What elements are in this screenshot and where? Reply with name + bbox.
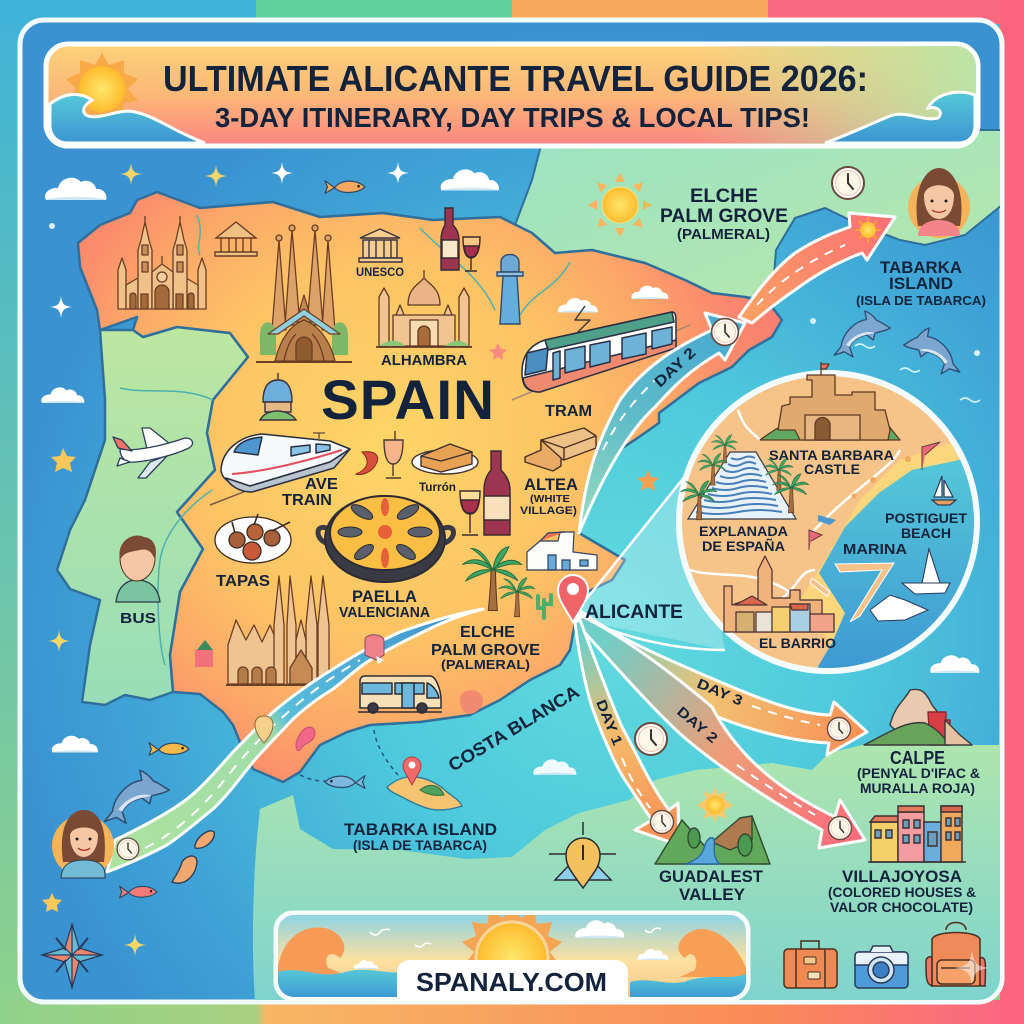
icon: compass rose — [42, 924, 102, 988]
icon: clock on sea — [635, 723, 667, 755]
street lines — [690, 410, 900, 600]
label: TABARKA ISLAND upper — [856, 258, 986, 308]
label: website: SPANALY.COM — [416, 967, 607, 997]
route: DAY 1 dashes — [622, 758, 650, 808]
sparkle — [954, 950, 990, 986]
icon: octopus — [460, 690, 483, 714]
icon: dolphin west — [105, 770, 169, 823]
icon: footer clouds — [354, 920, 668, 969]
icon: El Barrio houses — [724, 556, 834, 632]
label: DAY 3: DAY 3 — [695, 675, 745, 709]
label: AVE TRAIN: AVE — [305, 476, 338, 493]
label: Turron: Turrón — [419, 480, 456, 494]
icon: cactus — [538, 595, 551, 618]
label: ALTEA white village: ALTEA — [524, 475, 578, 494]
label: SANTA BARBARA CASTLE: SANTA BARBARA — [769, 447, 894, 463]
label: VILLAJOYOSA: (COLORED HOUSES & — [828, 885, 976, 900]
label: CALPE: (PENYAL D'IFAC & — [857, 766, 980, 781]
label: ELCHE PALM GROVE upper — [660, 186, 788, 243]
icon: footer left wave — [278, 928, 344, 974]
route: coral dashes — [757, 245, 845, 305]
icon: girl right avatar — [908, 168, 970, 238]
label: POSTIGUET BEACH: BEACH — [901, 525, 951, 541]
land: France top right — [515, 130, 1002, 300]
icon: sangria glass — [384, 431, 403, 478]
label: ELCHE PALM GROVE upper: ELCHE — [690, 186, 758, 207]
label: SANTA BARBARA CASTLE: CASTLE — [804, 461, 860, 477]
route: dashed from bus to island — [300, 730, 398, 781]
label: ALICANTE: ALICANTE — [585, 602, 683, 623]
icon: backpack — [926, 922, 985, 986]
ring — [679, 373, 977, 671]
icon: large sun — [575, 160, 665, 250]
icon: marina pier — [810, 563, 894, 622]
label: TABARKA ISLAND lower — [344, 820, 497, 853]
label: EXPLANADA DE ESPANA — [699, 523, 788, 554]
land: region borders — [120, 215, 570, 665]
label: TABARKA ISLAND lower: (ISLA DE TABARCA) — [353, 837, 487, 853]
label: UNESCO: UNESCO — [356, 265, 404, 279]
icon: seahorse — [296, 727, 315, 751]
label: GUADALEST VALLEY — [659, 867, 764, 904]
route: dashes — [603, 380, 655, 450]
icon: clock on DAY 2 — [712, 319, 738, 345]
sand strip — [801, 443, 960, 644]
label: ALTEA white village: VILLAGE) — [520, 505, 577, 517]
icon: fish south — [120, 886, 157, 898]
icon: banner sun — [66, 53, 138, 125]
icon: small sun over valley — [697, 787, 733, 823]
route: DAY 2 coral arrow — [739, 213, 895, 323]
route: light beam to inset — [580, 470, 725, 650]
icon: Alhambra — [376, 270, 472, 347]
label: CALPE: MURALLA ROJA) — [860, 781, 975, 796]
icon: palm tree large — [462, 547, 522, 610]
label: VILLAJOYOSA: VALOR CHOCOLATE) — [830, 900, 973, 915]
label: ELCHE PALM GROVE lower — [431, 624, 540, 672]
icon: small domed chapel — [260, 373, 296, 420]
clouds and sparkles — [41, 162, 980, 956]
label: ALTEA white village — [520, 475, 578, 517]
label: CALPE: CALPE — [890, 748, 945, 768]
land: Spain — [78, 192, 782, 782]
label: EXPLANADA DE ESPANA: DE ESPAÑA — [702, 537, 785, 554]
route: DAY 3 arrow — [576, 612, 867, 755]
label: TRAM: TRAM — [545, 403, 592, 420]
icon: suitcase — [784, 941, 837, 988]
label: VILLAJOYOSA — [828, 867, 976, 915]
icon: small stamp — [195, 640, 213, 667]
label: ELCHE PALM GROVE lower: PALM GROVE — [431, 642, 540, 659]
icon: airplane — [113, 428, 192, 478]
route: DAY 3 dashes — [752, 706, 820, 725]
icon: birds — [370, 928, 661, 947]
icon: cathedral north-west — [118, 216, 206, 309]
label: ELCHE PALM GROVE lower: ELCHE — [460, 624, 515, 641]
icon: clock DAY 2 lower — [828, 816, 852, 840]
label: AVE TRAIN — [282, 476, 338, 509]
icon: banner left wave — [50, 94, 205, 143]
label: EL BARRIO: EL BARRIO — [759, 635, 836, 651]
icon: tram — [512, 306, 690, 400]
route: road centre dashes — [145, 660, 360, 848]
label: PAELLA VALENCIANA — [339, 587, 430, 621]
icon: dolphin north east — [834, 311, 890, 357]
label: TABARKA ISLAND lower: TABARKA ISLAND — [344, 820, 497, 839]
icon: Villajoyosa houses — [868, 806, 966, 862]
label: COSTA BLANCA: COSTA BLANCA — [445, 682, 583, 775]
label: AVE TRAIN: TRAIN — [282, 492, 332, 509]
label: ELCHE PALM GROVE upper: PALM GROVE — [660, 206, 788, 227]
icon: Explanada promenade — [688, 452, 796, 519]
icon: sun on arrow — [855, 217, 881, 243]
land: North Africa bottom — [253, 745, 1002, 1002]
icon: clock top right — [832, 167, 864, 199]
icon: turron on plate — [412, 444, 478, 474]
fish north — [325, 181, 365, 193]
website pill — [397, 960, 628, 1000]
icon: Sagrada Familia — [256, 225, 352, 362]
icon: island vegetation — [420, 785, 444, 795]
route: DAY 2 lower arrow — [575, 616, 865, 848]
label: ELCHE PALM GROVE lower: (PALMERAL) — [441, 657, 530, 672]
title line 1: ULTIMATE ALICANTE TRAVEL GUIDE 2026: — [163, 58, 868, 99]
icon: Santa Barbara castle — [760, 362, 900, 440]
icon: dolphin east — [904, 328, 960, 374]
label: GUADALEST VALLEY: VALLEY — [679, 885, 746, 904]
label: ALTEA white village: (WHITE — [530, 493, 570, 505]
icon: waypoint flamenco — [365, 635, 384, 664]
icon: camera — [855, 946, 908, 988]
label: BUS + boy avatar: BUS — [120, 610, 156, 627]
label: DAY 1: DAY 1 — [593, 697, 626, 748]
label: CALPE — [857, 748, 980, 796]
footer banner — [275, 906, 749, 1000]
icon: banner right wave — [825, 92, 975, 143]
icon: footer water left — [278, 970, 397, 997]
label: TABARKA ISLAND upper: TABARKA — [880, 258, 962, 277]
icon: large turron — [525, 428, 596, 471]
label: TABARKA ISLAND upper: (ISLA DE TABARCA) — [856, 293, 986, 308]
icon: Canary islands — [172, 831, 214, 883]
icon: chili pepper — [356, 452, 378, 475]
icon: tapas plate — [215, 514, 291, 563]
icon: lighthouse — [497, 254, 523, 324]
icon: compass location pin — [549, 822, 616, 888]
icon: sailboat top — [932, 476, 956, 505]
icon: Calpe rock — [864, 689, 972, 745]
route: beam edges — [580, 470, 725, 650]
icon: paella pan — [318, 496, 454, 582]
label: BUS + boy avatar — [116, 536, 160, 627]
icon: AVE train — [210, 433, 350, 505]
title line 2: 3-DAY ITINERARY, DAY TRIPS & LOCAL TIPS! — [215, 102, 810, 133]
decoration: waves — [855, 344, 980, 402]
icon: footer water right — [630, 974, 746, 997]
label: EXPLANADA DE ESPANA: EXPLANADA — [699, 523, 788, 539]
icon: clock on left road — [117, 838, 139, 860]
icon: clock DAY 1 — [650, 810, 674, 834]
icon: bus — [358, 676, 442, 713]
label: TABARKA ISLAND upper: ISLAND — [889, 274, 953, 293]
label: DAY 2 upper: DAY 2 — [651, 344, 699, 391]
icon: white village — [527, 532, 597, 570]
icon: temple — [215, 222, 257, 256]
icon: blue fish — [325, 776, 365, 788]
label: TAPAS: TAPAS — [216, 573, 270, 590]
icon: promenade palms — [680, 435, 809, 520]
bay — [817, 460, 974, 668]
land: Portugal — [57, 327, 248, 705]
icon: yacht — [870, 595, 928, 621]
icon: cathedral south — [226, 576, 332, 685]
label: VILLAJOYOSA: VILLAJOYOSA — [842, 867, 962, 886]
icon: palm tree small — [498, 578, 535, 617]
label: PAELLA VALENCIANA: VALENCIANA — [339, 604, 430, 621]
label: ELCHE PALM GROVE upper: (PALMERAL) — [677, 226, 770, 243]
icon: island pin — [403, 757, 421, 785]
icon: clock DAY 3 — [827, 717, 851, 741]
icon: wine bottle and glass south — [460, 451, 510, 535]
label: POSTIGUET BEACH — [885, 510, 967, 541]
icon: wine bottle and glass — [441, 208, 480, 271]
route: DAY 1 arrow — [575, 620, 679, 845]
inset: Alicante city map circle — [679, 362, 1000, 690]
icon: Guadalest valley — [655, 816, 770, 864]
icon: Tabarca island — [387, 777, 462, 810]
title banner — [46, 44, 978, 146]
icon: flags and beach items — [809, 442, 940, 550]
label: DAY 2 lower: DAY 2 — [674, 703, 721, 746]
icon: waypoint medallion — [255, 716, 273, 743]
icon: girl left avatar — [52, 810, 114, 878]
label: GUADALEST VALLEY: GUADALEST — [659, 867, 764, 886]
icon: footer sun — [462, 915, 562, 960]
icon: fish west — [149, 743, 189, 755]
label: PAELLA VALENCIANA: PAELLA — [352, 587, 417, 606]
map: all land — [57, 130, 1002, 1002]
label: ALHAMBRA: ALHAMBRA — [381, 352, 467, 369]
icon: UNESCO temple — [359, 229, 402, 262]
route: Malaga road — [107, 609, 483, 872]
label: SANTA BARBARA CASTLE — [769, 447, 894, 477]
route: DAY 2 dashes — [737, 765, 815, 815]
icon: sailboat — [902, 549, 950, 594]
icon: Alicante pin — [558, 575, 588, 622]
route: DAY 2 blue arrow — [579, 313, 745, 533]
label: POSTIGUET BEACH: POSTIGUET — [885, 510, 967, 526]
icon: footer right wave — [678, 929, 746, 977]
label: MARINA: MARINA — [843, 541, 907, 558]
title: SPAIN: SPAIN — [321, 368, 495, 431]
